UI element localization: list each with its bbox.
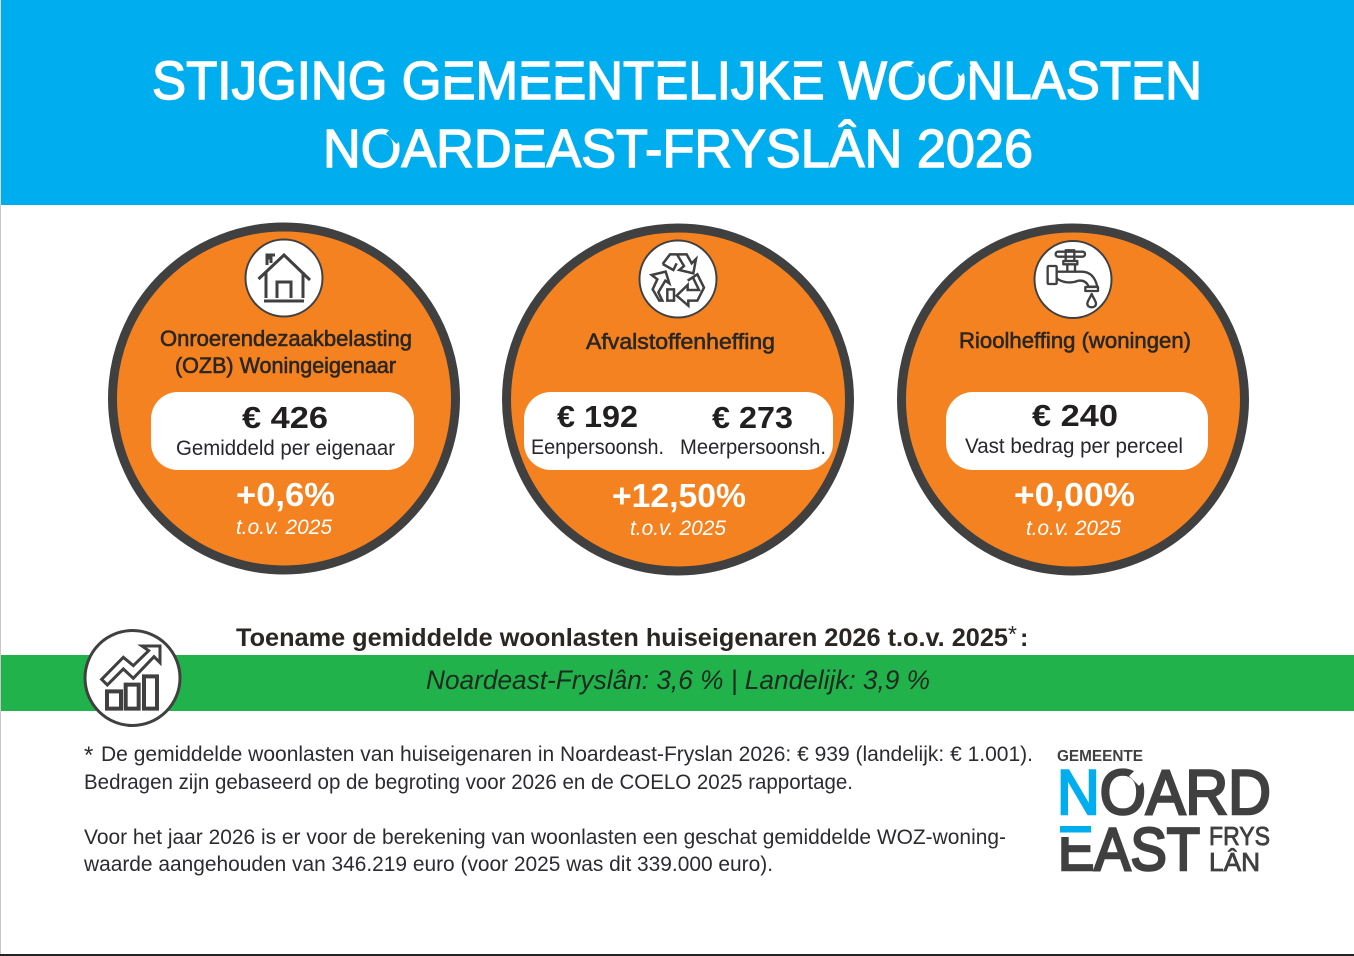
value box: € 273 xyxy=(712,400,793,435)
subheading: * xyxy=(1008,621,1017,647)
value box: € 192 xyxy=(557,399,638,434)
value box xyxy=(524,392,833,470)
title banner: NOARDEAST-FRYSLÂN 2026 xyxy=(323,119,1033,179)
icon: recycling xyxy=(640,240,716,318)
green band xyxy=(1,655,1354,711)
footnotes xyxy=(83,742,1033,876)
logo: FRYS xyxy=(1209,821,1270,851)
value box xyxy=(946,392,1208,470)
change: +0,00% xyxy=(1014,476,1135,513)
change: +0,6% xyxy=(236,476,335,513)
logo xyxy=(1056,748,1271,883)
footnotes: Voor het jaar 2026 is er voor de berekening van woonlasten een geschat gemiddelde WOZ-woning- xyxy=(84,825,1006,849)
change xyxy=(612,477,746,540)
logo: NOARD xyxy=(1057,758,1271,828)
value box: € 240 xyxy=(1032,398,1118,433)
heading: Afvalstoffenheffing xyxy=(586,329,775,354)
heading xyxy=(160,326,412,378)
value box: Eenpersoonsh. xyxy=(531,436,664,459)
green band: Noardeast-Fryslân: 3,6 % | Landelijk: 3,9 % xyxy=(426,665,930,695)
logo: LÂN xyxy=(1209,847,1260,877)
change: t.o.v. 2025 xyxy=(630,517,726,540)
value box xyxy=(151,392,414,470)
panel: rioolheffing xyxy=(902,228,1244,571)
icon: water tap xyxy=(1034,241,1112,318)
subheading: : xyxy=(1020,624,1028,652)
panel: OZB xyxy=(112,227,456,570)
icon: house xyxy=(246,240,322,316)
change: t.o.v. 2025 xyxy=(236,516,332,539)
subheading: Toename gemiddelde woonlasten huiseigenaren 2026 t.o.v. 2025 xyxy=(236,624,1008,652)
heading: (OZB) Woningeigenaar xyxy=(175,353,396,378)
logo: GEMEENTE xyxy=(1057,748,1143,765)
value box: Vast bedrag per perceel xyxy=(965,435,1183,458)
panel: afvalstoffenheffing xyxy=(506,228,850,571)
footnotes: De gemiddelde woonlasten van huiseigenaren in Noardeast-Fryslan 2026: € 939 (landelijk: € 1.001). xyxy=(101,742,1033,766)
heading: Onroerendezaakbelasting xyxy=(160,326,412,351)
value box: Meerpersoonsh. xyxy=(680,436,826,459)
footnotes: waarde aangehouden van 346.219 euro (voor 2025 was dit 339.000 euro). xyxy=(83,852,773,876)
title banner: STIJGING GEMEENTELIJKE WOONLASTEN xyxy=(152,51,1202,111)
value box: € 426 xyxy=(242,400,328,435)
footnotes: * xyxy=(84,742,93,769)
change: +12,50% xyxy=(612,477,746,514)
change xyxy=(1014,476,1135,540)
heading: Rioolheffing (woningen) xyxy=(959,328,1191,353)
icon: rising chart xyxy=(85,630,180,726)
value box: Gemiddeld per eigenaar xyxy=(176,437,395,460)
change: t.o.v. 2025 xyxy=(1026,517,1121,540)
change xyxy=(236,476,335,539)
footnotes: Bedragen zijn gebaseerd op de begroting voor 2026 en de COELO 2025 rapportage. xyxy=(84,770,853,794)
logo: EAST xyxy=(1058,816,1200,883)
title banner xyxy=(0,0,1354,205)
